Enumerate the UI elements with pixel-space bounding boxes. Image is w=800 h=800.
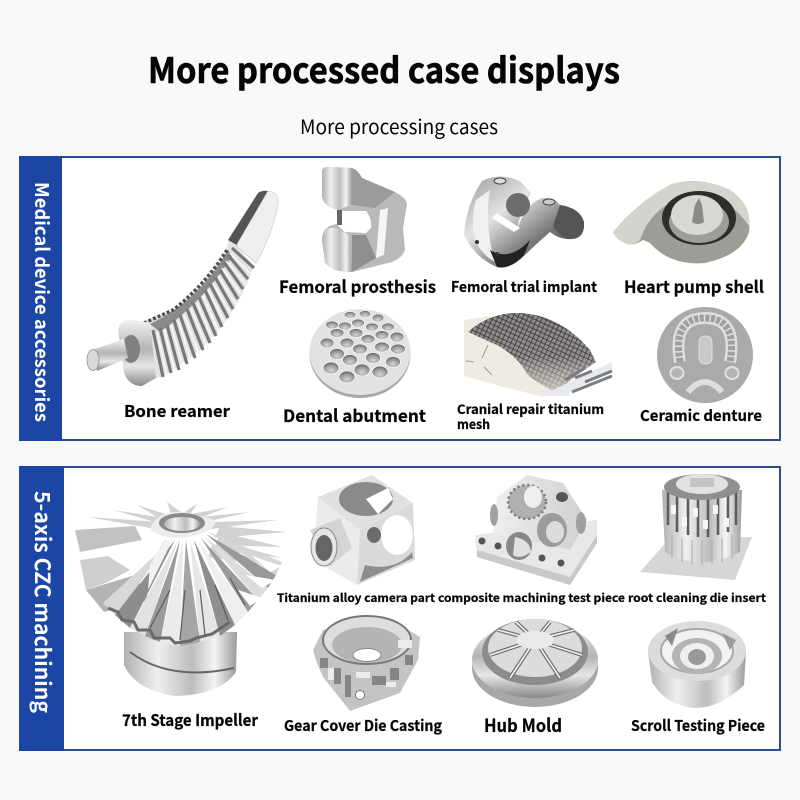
item: cranial repair titanium mesh [457,313,612,433]
item: cranial repair titanium mesh: Cranial repair titanium [457,399,604,418]
item: bone reamer: Bone reamer [124,398,230,422]
item: gear cover die casting: Gear Cover Die Casting [284,715,442,736]
panel: 5-axis machining [19,466,780,751]
item: hub mold [472,619,598,738]
item: root cleaning die insert [628,474,766,606]
subtitle: More processing cases [300,111,498,140]
item: 7th stage impeller [75,502,287,731]
item: heart pump shell [613,181,764,298]
item: heart pump shell: Heart pump shell [624,274,764,298]
item: scroll testing piece: Scroll Testing Piece [631,715,765,736]
item: femoral prosthesis: Femoral prosthesis [279,273,436,298]
item: femoral prosthesis [279,167,436,298]
sidebar: medical device accessories [19,156,62,441]
item: ceramic denture [640,307,762,426]
item: dental abutment [283,309,426,427]
item: dental abutment: Dental abutment [283,402,426,427]
item: composite machining test piece: composite machining test piece [438,590,625,606]
sidebar: 5-axis CZC machining: 5-axis CZC machining [28,491,58,713]
item: bone reamer [87,191,278,422]
item: cranial repair titanium mesh: mesh [457,414,490,433]
item: femoral trial implant [451,176,597,297]
item: hub mold: Hub Mold [484,712,562,738]
sidebar: medical device accessories: Medical device accessories [29,182,56,422]
sidebar: 5-axis CZC machining [19,466,64,751]
item: titanium alloy camera part [277,475,435,606]
item: scroll testing piece [631,621,765,736]
item: root cleaning die insert: root cleaning die insert [628,590,766,606]
item: 7th stage impeller: 7th Stage Impeller [122,707,258,731]
panel: medical device accessories [19,156,780,441]
title: More processed case displays [148,43,620,94]
item: gear cover die casting [284,615,442,736]
item: composite machining test piece [438,475,625,606]
item: femoral trial implant: Femoral trial implant [451,276,597,297]
item: ceramic denture: Ceramic denture [640,405,762,426]
item: titanium alloy camera part: Titanium alloy camera part [277,590,435,606]
